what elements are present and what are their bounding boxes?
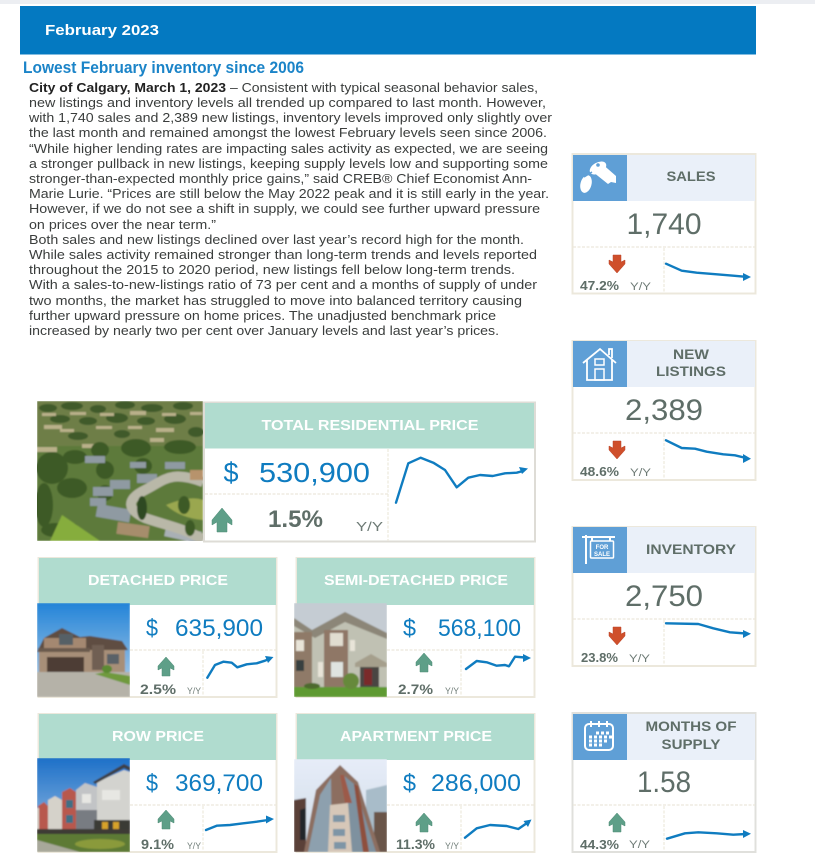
icon: up arrow — [416, 653, 432, 672]
panel: new listings: 48.6% — [580, 464, 619, 479]
panel: detached price: DETACHED PRICE — [88, 573, 228, 589]
body text: on prices over the near term.” — [29, 218, 216, 232]
photo: row houses — [37, 758, 130, 852]
panel: semi-detached price: $ — [403, 615, 416, 642]
icon: up arrow — [212, 508, 232, 532]
body text: With a sales-to-new-listings ratio of 73 per cent and a months of supply of under — [29, 278, 537, 292]
panel: detached price: 635,900 — [175, 615, 263, 642]
icon: for sale sign: SALE — [594, 552, 610, 558]
detached sparkline — [207, 656, 274, 678]
header banner: February 2023 — [45, 22, 159, 39]
body text: City of Calgary, March 1, 2023 — [29, 81, 226, 95]
body text: Marie Lurie. “Prices are still below the May 2022 peak and it is still early in the year. — [29, 187, 549, 201]
photo: detached house — [37, 603, 130, 697]
headline: Lowest February inventory since 2006 — [23, 58, 304, 77]
panel: months of supply: 44.3% — [580, 837, 619, 852]
panel: sales: 47.2% — [580, 278, 619, 293]
panel: apartment price: 286,000 — [431, 770, 521, 797]
body text: two months, the market has struggled to move into balanced territory causing — [29, 294, 522, 308]
panel: sales: 1,740 — [626, 208, 702, 241]
icon: up arrow — [158, 657, 174, 676]
body text: “While higher lending rates are impacting sales activity as expected, we are seeing — [29, 142, 548, 156]
panel: inventory: 2,750 — [625, 580, 703, 613]
panel: new listings: Y/Y — [630, 467, 652, 479]
body text: with 1,740 sales and 2,389 new listings, inventory levels improved only slightly over — [28, 111, 552, 125]
panel: apartment price — [296, 714, 535, 852]
panel: row price: $ — [146, 770, 158, 797]
panel: semi-detached price: SEMI-DETACHED PRICE — [324, 573, 508, 589]
icon: up arrow — [158, 810, 174, 829]
body text: increased by nearly two per cent over January levels and last year’s prices. — [29, 324, 499, 338]
panel: total residential price: $ — [224, 457, 239, 488]
body text: a stronger pullback in new listings, keeping supply levels low and supporting some — [29, 157, 548, 171]
semi-detached sparkline — [466, 654, 531, 669]
panel: new listings — [572, 341, 756, 480]
body text: Both sales and new listings declined over last year’s record high for the month. — [29, 233, 524, 247]
body text: new listings and inventory levels all trended up compared to last month. However, — [29, 96, 546, 110]
photo: apartment tower — [294, 759, 387, 852]
panel: months of supply: Y/Y — [629, 839, 651, 851]
row sparkline — [206, 816, 274, 830]
panel: months of supply — [572, 713, 756, 852]
panel: apartment price: 11.3% — [396, 836, 436, 852]
panel: row price: 369,700 — [175, 770, 263, 797]
body text: the last month and remained amongst the lowest February levels seen since 2006. — [29, 126, 547, 140]
new listings sparkline — [666, 440, 751, 463]
panel: sales: SALES — [666, 169, 716, 184]
icon: for sale sign — [573, 527, 627, 573]
panel: months of supply: SUPPLY — [662, 737, 720, 752]
panel: apartment price: Y/Y — [445, 841, 459, 851]
panel: semi-detached price: Y/Y — [445, 686, 459, 696]
panel: new listings: LISTINGS — [656, 364, 726, 379]
panel: detached price — [38, 558, 277, 697]
panel: total residential price: 1.5% — [268, 506, 323, 533]
body text: However, if we do not see a shift in supply, we could see further upward pressure — [29, 202, 540, 216]
panel: inventory — [572, 527, 756, 666]
panel: detached price: 2.5% — [140, 681, 177, 697]
panel: row price: ROW PRICE — [112, 729, 204, 745]
panel: semi-detached price: 2.7% — [398, 681, 434, 697]
panel: months of supply: MONTHS OF — [646, 719, 736, 734]
panel: detached price: Y/Y — [187, 686, 201, 696]
body text: stronger-than-expected monthly price gains,” said CREB® Chief Economist Ann- — [29, 172, 532, 186]
body text: While sales activity remained stronger than long-term trends and levels reported — [29, 248, 537, 262]
panel: sales: Y/Y — [630, 281, 652, 293]
panel: row price: 9.1% — [141, 836, 175, 852]
panel: semi-detached price — [296, 558, 535, 697]
panel: inventory: 23.8% — [581, 650, 618, 665]
icon: house — [573, 341, 627, 387]
photo: semi-detached house — [294, 603, 387, 697]
sales sparkline — [666, 264, 751, 281]
panel: row price — [38, 714, 277, 852]
panel: detached price: $ — [146, 615, 158, 642]
icon: down arrow — [609, 255, 625, 273]
body text: further upward pressure on home prices. The unadjusted benchmark price — [29, 309, 496, 323]
apartment sparkline — [465, 820, 532, 838]
panel: row price: Y/Y — [187, 841, 201, 851]
icon: down arrow — [609, 627, 625, 645]
body text: throughout the 2015 to 2020 period, new listings fell below long-term trends. — [29, 263, 515, 277]
icon: up arrow — [416, 813, 432, 832]
panel: total residential price: Y/Y — [356, 519, 383, 534]
icon: calendar — [573, 714, 627, 760]
panel: total residential price: 530,900 — [259, 457, 370, 488]
panel: sales — [572, 154, 756, 294]
panel: semi-detached price: 568,100 — [438, 615, 521, 642]
inventory sparkline — [666, 623, 751, 638]
panel: new listings: NEW — [673, 347, 709, 362]
panel: total residential price — [204, 402, 535, 542]
panel: apartment price: APARTMENT PRICE — [340, 729, 492, 745]
panel: inventory: Y/Y — [629, 653, 651, 665]
photo: aerial neighbourhood — [35, 401, 204, 544]
icon: up arrow — [609, 813, 625, 832]
panel: new listings: 2,389 — [625, 394, 703, 427]
header banner — [20, 6, 756, 54]
panel: total residential price: TOTAL RESIDENTIAL PRICE — [262, 418, 479, 434]
panel: inventory: INVENTORY — [646, 542, 736, 557]
total residential sparkline — [396, 458, 528, 503]
months of supply sparkline — [667, 830, 751, 839]
icon: for sale sign: FOR — [596, 545, 609, 551]
body text — [28, 81, 552, 338]
body text: – Consistent with typical seasonal behavior sales, — [230, 81, 538, 95]
panel: apartment price: $ — [403, 770, 416, 797]
panel: months of supply: 1.58 — [637, 766, 691, 799]
icon: down arrow — [609, 441, 625, 459]
icon: keys — [573, 155, 627, 201]
